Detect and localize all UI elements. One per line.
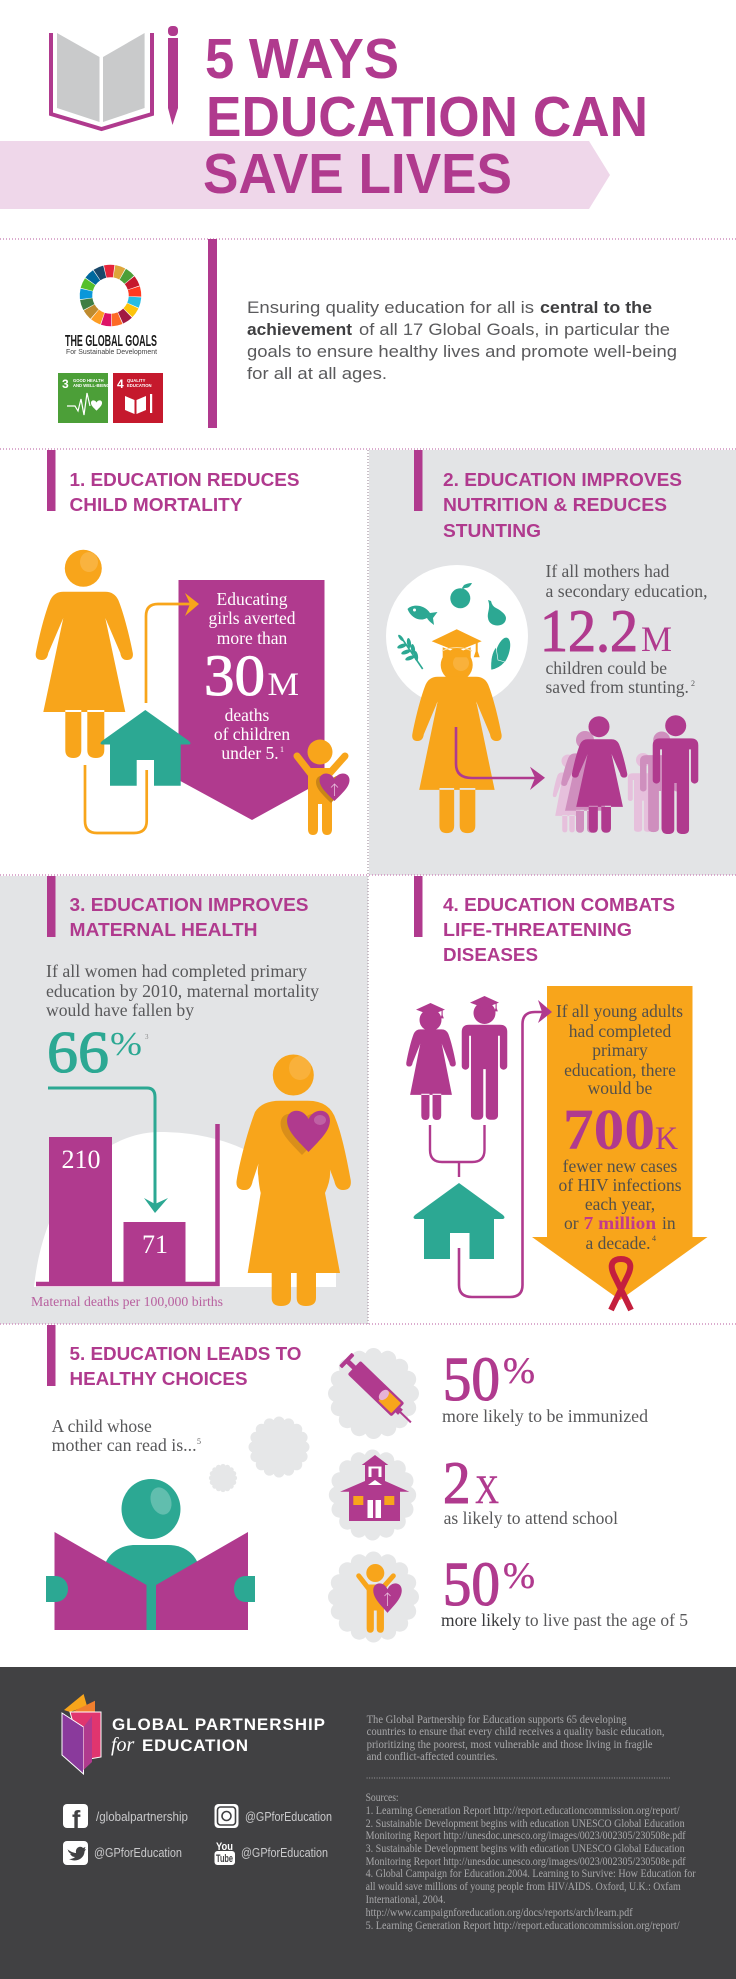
text: sources: http://www.campaignforeducation.org/docs/reports/arch/learn.pdf (366, 1907, 633, 1919)
text: sources: 5. Learning Generation Report http://report.educationcommission.org/report/ (366, 1920, 680, 1932)
purple callout arrow with 30M: girls averted (209, 608, 296, 628)
heading 2 (414, 450, 682, 541)
orange arrow callout with 700K: or (564, 1213, 579, 1233)
bar chart: 71 (142, 1230, 168, 1259)
panel: footer (0, 1667, 736, 1979)
arrow: woman through house to callout (85, 593, 199, 833)
GPE wordmark (111, 1715, 325, 1756)
orange arrow callout with 700K: K (655, 1121, 678, 1157)
intro text: central to the (540, 299, 652, 317)
white circle (386, 565, 528, 707)
GPE wordmark: GLOBAL PARTNERSHIP (112, 1715, 325, 1734)
icon: facebook (63, 1804, 188, 1834)
stat: 50 percent immunized: more likely to be immunized (442, 1406, 648, 1426)
stat text 12.2M: If all mothers had (546, 561, 670, 581)
panel: 2 nutrition and stunting (386, 450, 708, 834)
heading 5: 5. EDUCATION LEADS TO (70, 1343, 302, 1364)
panel: 5 healthy choices (46, 1325, 688, 1642)
icon: global goals wheel (76, 261, 145, 330)
heading 1: CHILD MORTALITY (70, 494, 243, 515)
icon: youtube: @GPforEducation (241, 1845, 328, 1860)
heading 2: STUNTING (443, 520, 541, 541)
intro text: goals to ensure healthy lives and promote well-being (247, 343, 677, 361)
purple callout arrow with 30M: under 5. (221, 743, 279, 763)
icon: goal 4 tile: QUALITY (127, 378, 146, 383)
text block: would have fallen by (46, 1000, 194, 1020)
stat: 2x attend school: X (475, 1467, 499, 1512)
text: a child whose mother: 5 (197, 1437, 201, 1446)
heading 4: DISEASES (443, 944, 538, 965)
icon: youtube (214, 1841, 328, 1865)
stat: 50 percent live past 5: more likely (441, 1610, 521, 1630)
orange arrow callout with 700K: fewer new cases (563, 1156, 678, 1176)
stat text 12.2M: 2 (691, 679, 695, 688)
text block: If all women had completed primary (46, 961, 307, 981)
stat: 50 percent immunized: 50 (443, 1346, 500, 1414)
text block: education by 2010, maternal mortality (46, 981, 319, 1001)
panel: intro (58, 239, 677, 428)
stat text 12.2M: a secondary education, (546, 581, 708, 601)
connector to house (430, 1125, 484, 1177)
purple callout arrow with 30M: of children (214, 724, 290, 744)
arrow: house to callout (459, 1000, 552, 1297)
intro text: achievement (247, 321, 353, 339)
text: sources: International, 2004. (366, 1894, 446, 1906)
global goals wordmark: THE GLOBAL GOALS (65, 333, 157, 350)
stat text 12.2M: children could be (546, 658, 667, 678)
heading 1 (47, 450, 300, 515)
text: about GPE: prioritizing the poorest, most vulnerable and those living in fragile (367, 1739, 653, 1751)
icon: goal 3 tile: AND WELL-BEING (73, 383, 110, 388)
icon: pregnant woman with heart (236, 1054, 351, 1306)
icon: goal 3 tile: GOOD HEALTH (73, 378, 104, 383)
stat: 2x attend school: as likely to attend school (444, 1508, 618, 1528)
stat 66%: 66 (47, 1019, 109, 1085)
icon: graduate woman and man (406, 996, 507, 1120)
text: about GPE: and conflict-affected countries. (367, 1751, 498, 1763)
text: sources: Monitoring Report http://unesdoc.unesco.org/images/0023/002305/230508e.pdf (366, 1856, 686, 1868)
icon: child with heart (328, 1552, 419, 1642)
global goals wordmark: For Sustainable Development (66, 349, 157, 356)
text: sources: Monitoring Report http://unesdoc.unesco.org/images/0023/002305/230508e.pdf (366, 1830, 686, 1842)
intro text (247, 299, 677, 383)
bar chart (31, 1124, 223, 1310)
purple callout arrow with 30M: M (268, 667, 299, 703)
icon: goal 3 tile (58, 373, 110, 423)
GPE wordmark: for (111, 1734, 135, 1756)
heading 3: MATERNAL HEALTH (70, 919, 258, 940)
icon: corn (491, 636, 513, 670)
icon: goal 3 tile: 3 (62, 377, 69, 391)
icon: woman (36, 550, 133, 758)
icons: food (397, 583, 513, 670)
text: a child whose mother: A child whose (52, 1416, 152, 1436)
stat: 50 percent live past 5 (441, 1551, 688, 1630)
panel: background greys (0, 450, 736, 1324)
orange arrow callout with 700K: 7 million (584, 1213, 656, 1233)
heading 3: 3. EDUCATION IMPROVES (70, 894, 308, 915)
stat text 12.2M (540, 561, 708, 697)
text block (46, 961, 319, 1020)
icon: goal 4 tile: EDUCATION (127, 383, 152, 388)
icon: apple (450, 583, 472, 608)
title: SAVE LIVES (203, 142, 512, 206)
purple callout arrow with 30M: more than (217, 628, 287, 648)
title (203, 27, 648, 206)
stat: 2x attend school: 2 (443, 1450, 470, 1516)
intro text: for all at all ages. (247, 365, 387, 383)
orange arrow callout with 700K: primary (592, 1040, 648, 1060)
icon: family figures (553, 715, 698, 834)
icon: wheat (397, 634, 423, 669)
icon: goal 4 tile (113, 373, 163, 423)
purple callout arrow with 30M: deaths (225, 705, 270, 725)
icon: twitter: @GPforEducation (94, 1845, 182, 1860)
stat: 50 percent immunized: % (503, 1351, 535, 1392)
panel: 4 life-threatening diseases (406, 876, 708, 1310)
stat 66% (47, 1019, 149, 1085)
stat: 50 percent live past 5: to live past the age of 5 (525, 1610, 688, 1630)
icon: fish (408, 606, 438, 625)
stat text 12.2M: M (641, 619, 672, 659)
text: sources (366, 1792, 696, 1932)
text: sources: 4. Global Campaign for Education.2004. Learning to Survive: How Education for (366, 1868, 696, 1880)
purple callout arrow with 30M (178, 580, 324, 820)
text: sources: 3. Sustainable Development begins with education UNESCO Global Education (366, 1843, 685, 1855)
banner arrow behind title (0, 141, 610, 209)
orange arrow callout with 700K: a decade. (585, 1233, 651, 1253)
stat 66%: 3 (145, 1033, 149, 1041)
arrow: 66 percent down (48, 1088, 168, 1213)
orange arrow callout with 700K: would be (588, 1078, 653, 1098)
icon: syringe (328, 1348, 419, 1439)
text: sources: 1. Learning Generation Report http://report.educationcommission.org/report/ (366, 1805, 680, 1817)
orange arrow callout with 700K: in (662, 1213, 676, 1233)
icon: school (329, 1450, 416, 1540)
text: sources: Sources: (366, 1792, 399, 1804)
icon: instagram (214, 1804, 332, 1828)
arrow: graduate to children (456, 727, 545, 790)
heading 5 (47, 1325, 302, 1389)
panel: 1 child mortality (36, 450, 350, 835)
heading 4: LIFE-THREATENING (443, 919, 632, 940)
purple callout arrow with 30M: Educating (217, 589, 288, 609)
global goals wordmark (65, 333, 157, 356)
icon: goal 4 tile: 4 (117, 377, 124, 391)
text: sources: all would save millions of young people from HIV/AIDS. Oxford, U.K.: Oxfam (366, 1881, 681, 1893)
orange arrow callout with 700K: 4 (652, 1234, 656, 1243)
bar chart: 210 (62, 1145, 100, 1174)
title: 5 WAYS (205, 27, 399, 91)
icon: house (100, 710, 190, 786)
icon: facebook: f (72, 1806, 81, 1834)
icon: pear (488, 600, 506, 626)
icon: house (414, 1183, 504, 1259)
orange arrow callout with 700K: of HIV infections (558, 1175, 682, 1195)
text: about GPE: countries to ensure that every child receives a quality basic education, (367, 1726, 665, 1738)
icon: youtube: You (216, 1841, 233, 1853)
orange arrow callout with 700K: If all young adults (556, 1001, 683, 1021)
heading 4: 4. EDUCATION COMBATS (443, 894, 675, 915)
heading 2: NUTRITION & REDUCES (443, 494, 667, 515)
stat text 12.2M: 12.2 (540, 598, 638, 664)
divider bar (208, 239, 217, 428)
icon: child with heart (297, 740, 350, 835)
white dome (34, 1132, 336, 1287)
icon: twitter (63, 1841, 182, 1865)
intro text: of all 17 Global Goals, in particular the (359, 321, 670, 339)
icon: open book and pencil (51, 26, 178, 129)
text: a child whose mother: mother can read is... (52, 1435, 197, 1455)
stat: 2x attend school (443, 1450, 618, 1528)
purple callout arrow with 30M: 1 (280, 745, 284, 754)
orange arrow callout with 700K: each year, (585, 1194, 655, 1214)
stat: 50 percent live past 5: % (503, 1556, 535, 1597)
icon: red ribbon (611, 1259, 631, 1310)
orange arrow callout with 700K: 700 (563, 1097, 655, 1162)
text: about GPE (367, 1714, 665, 1763)
stat: 50 percent immunized (442, 1346, 648, 1426)
heading 1: 1. EDUCATION REDUCES (70, 469, 300, 490)
heading 4 (414, 876, 675, 965)
GPE wordmark: EDUCATION (142, 1736, 248, 1755)
intro text: Ensuring quality education for all is (247, 299, 534, 317)
text: a child whose mother (52, 1416, 201, 1455)
thought bubbles (209, 1417, 309, 1492)
icon: GPE book logo (62, 1694, 101, 1774)
icon: youtube: Tube (216, 1853, 233, 1865)
stat: 50 percent live past 5: 50 (443, 1551, 500, 1619)
icon: facebook: /globalpartnership (96, 1809, 188, 1824)
icon: reader with book (46, 1479, 255, 1630)
panel: 3 maternal health (31, 876, 351, 1310)
text: sources: 2. Sustainable Development begins with education UNESCO Global Education (366, 1818, 685, 1830)
stat 66%: % (110, 1026, 142, 1063)
stat text 12.2M: saved from stunting. (546, 677, 689, 697)
icon: instagram: @GPforEducation (245, 1809, 332, 1824)
heading 2: 2. EDUCATION IMPROVES (443, 469, 682, 490)
bar chart: Maternal deaths per 100,000 births (31, 1295, 223, 1310)
title: EDUCATION CAN (206, 85, 648, 149)
text: about GPE: The Global Partnership for Education supports 65 developing (367, 1714, 627, 1726)
purple callout arrow with 30M: 30 (204, 643, 265, 708)
orange arrow callout with 700K (532, 986, 708, 1300)
icon: graduate woman (412, 629, 502, 833)
orange arrow callout with 700K: education, there (564, 1060, 676, 1080)
orange arrow callout with 700K: had completed (569, 1021, 672, 1041)
heading 3 (47, 876, 308, 940)
heading 5: HEALTHY CHOICES (70, 1368, 248, 1389)
